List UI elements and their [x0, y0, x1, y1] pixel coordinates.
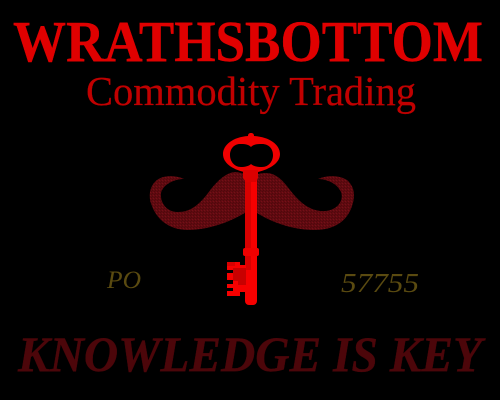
- icon: moustache: [150, 172, 354, 230]
- subtitle: Commodity Trading: [86, 68, 416, 114]
- key upper collar: [243, 170, 258, 182]
- key bow: [223, 133, 280, 172]
- key bit: [227, 262, 246, 296]
- icon: key: [223, 133, 280, 305]
- key lower collar: [243, 248, 259, 256]
- tagline: KNOWLEDGE IS KEY: [17, 326, 486, 382]
- key shaft: [245, 172, 257, 298]
- left label: PO: [106, 267, 141, 294]
- right label: 57755: [341, 268, 419, 298]
